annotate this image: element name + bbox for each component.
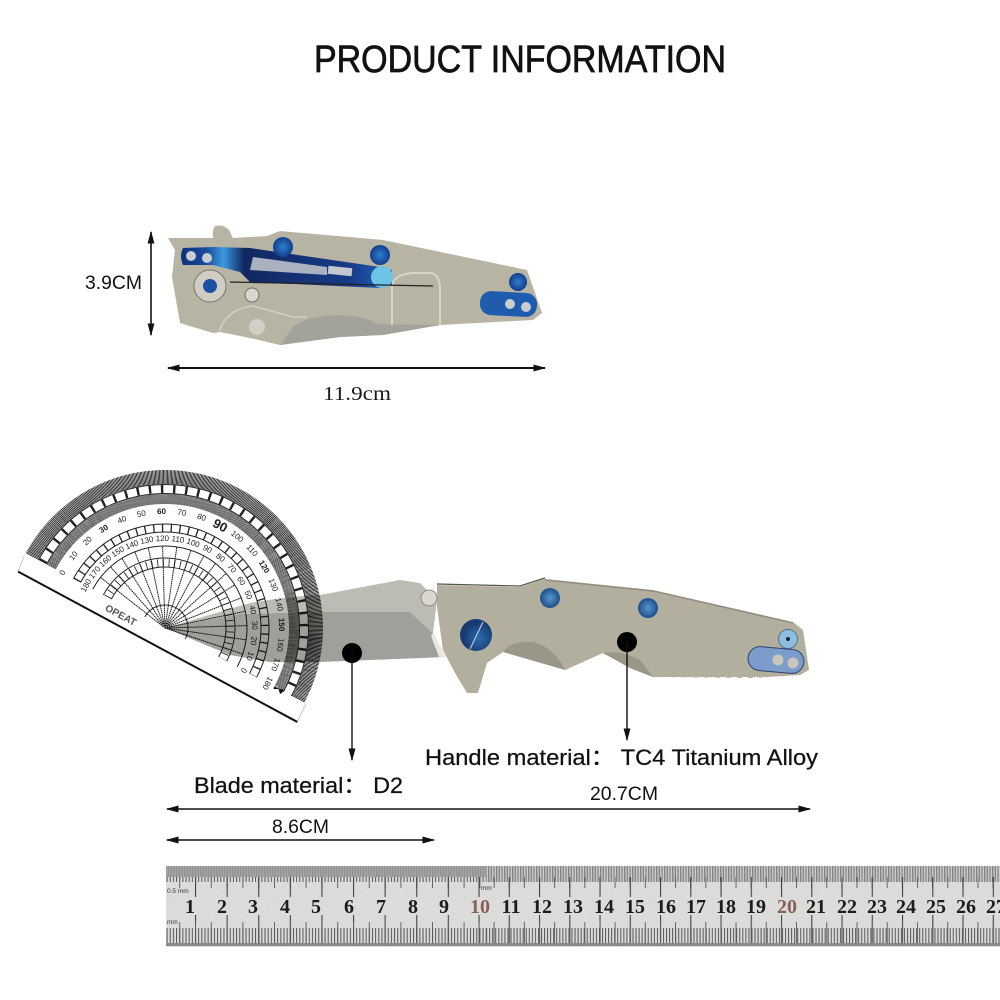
protractor inner scale: 140: [124, 538, 140, 551]
handle groove highlight: [219, 306, 307, 331]
height label: 3.9CM: [85, 273, 142, 294]
ruler numbers: 23: [867, 896, 887, 918]
ruler numbers: 17: [686, 896, 706, 918]
ruler numbers: 20: [777, 896, 797, 918]
protractor outer scale: 120: [257, 559, 272, 575]
total length label: 20.7CM: [590, 784, 658, 805]
ruler numbers: 24: [896, 896, 916, 918]
protractor outer scale: 80: [196, 512, 208, 523]
blade stop pin: [421, 590, 437, 606]
folded knife: [168, 226, 542, 345]
ruler numbers: 25: [926, 896, 946, 918]
protractor inner scale: 80: [214, 551, 227, 564]
protractor inner scale: 10: [244, 650, 256, 662]
blue screws: [273, 237, 527, 291]
pocket clip: [181, 247, 393, 288]
protractor inner scale: 180: [79, 577, 94, 594]
protractor outer scale: 100: [229, 529, 246, 545]
ruler numbers: 18: [716, 896, 736, 918]
protractor outer scale: 40: [116, 514, 128, 526]
lock line: [230, 282, 433, 286]
handle material label: Handle material： TC4 Titanium Alloy: [425, 745, 818, 770]
ruler numbers: 26: [956, 896, 976, 918]
protractor inner scale: 130: [139, 534, 155, 546]
ruler numbers: 14: [594, 896, 614, 918]
protractor outer scale: 60: [157, 507, 167, 516]
ruler numbers: 16: [656, 896, 676, 918]
ruler numbers: 2: [217, 896, 227, 918]
protractor inner scale: 170: [87, 564, 103, 581]
protractor outer scale: 0: [57, 568, 68, 577]
ruler numbers: 4: [280, 896, 290, 918]
handle top edge: [437, 578, 545, 586]
ruler numbers: 13: [563, 896, 583, 918]
protractor inner scale: 40: [247, 605, 258, 616]
ruler numbers: 6: [344, 896, 354, 918]
protractor inner scale: 150: [110, 544, 126, 559]
width dimension arrow: [168, 367, 545, 369]
blade callout: [342, 643, 362, 760]
protractor outer scale: 170: [269, 657, 282, 673]
ruler numbers: 21: [806, 896, 826, 918]
protractor outer scale: 110: [244, 543, 260, 559]
ruler numbers: 5: [311, 896, 321, 918]
ruler numbers: 12: [532, 896, 552, 918]
ruler unit labels: [167, 885, 492, 926]
protractor outer scale: 50: [136, 509, 147, 519]
folded knife body: [168, 226, 542, 345]
height dimension arrow: [150, 232, 152, 335]
folded blade edge: [280, 315, 440, 345]
ruler numbers: 15: [625, 896, 645, 918]
ruler numbers: [185, 896, 1000, 918]
ruler numbers: 9: [439, 896, 449, 918]
ruler unit labels: mm: [481, 885, 492, 892]
handle serrations: [665, 677, 800, 679]
protractor inner scale: 120: [156, 534, 170, 543]
protractor outer scale: 30: [98, 522, 110, 535]
protractor: [15, 411, 383, 722]
ruler numbers: 8: [408, 896, 418, 918]
protractor outer scale: 10: [67, 549, 80, 562]
ruler numbers: 10: [470, 896, 490, 918]
ruler numbers: 1: [185, 896, 195, 918]
protractor outer scale: [55, 461, 330, 692]
ruler numbers: 19: [746, 896, 766, 918]
handle: [437, 579, 809, 693]
handle top bevel: [545, 580, 793, 623]
ruler numbers: 3: [248, 896, 258, 918]
silver screws: [245, 288, 265, 335]
protractor inner scale: 90: [201, 543, 214, 556]
protractor outer scale: 140: [273, 597, 285, 612]
protractor outer scale: 130: [267, 577, 280, 593]
protractor outer scale: 160: [275, 638, 286, 653]
blade: [165, 580, 446, 662]
ruler unit labels: 0.5 mm: [167, 888, 189, 895]
protractor outer scale: 90: [210, 515, 230, 535]
pivot: [194, 270, 226, 302]
total length arrow: [167, 808, 810, 810]
steel ruler: [166, 866, 1000, 947]
protractor inner scale: 110: [171, 534, 185, 545]
pivot screw: [460, 619, 492, 651]
handle screws: [540, 588, 798, 648]
width label: 11.9cm: [323, 383, 392, 405]
protractor outer scale: 150: [277, 618, 286, 632]
title: PRODUCT INFORMATION: [314, 39, 726, 81]
ruler numbers: 22: [837, 896, 857, 918]
protractor inner scale: 50: [242, 589, 254, 601]
protractor inner scale: 100: [185, 537, 201, 550]
unfolded knife: [165, 578, 809, 693]
blade length arrow: [167, 839, 434, 841]
blade length label: 8.6CM: [272, 817, 329, 838]
protractor brand: OPEAT: [103, 603, 138, 629]
protractor outer scale: 20: [81, 534, 94, 547]
protractor outer scale: 70: [177, 508, 187, 518]
handle callout: [617, 632, 637, 740]
ruler numbers: 11: [502, 896, 520, 918]
rear plate: [747, 646, 805, 674]
protractor inner scale: 0: [239, 666, 249, 675]
finger groove shading: [503, 642, 653, 677]
protractor inner scale: 70: [226, 562, 239, 575]
protractor inner scale: 20: [248, 636, 259, 647]
protractor radial lines: [94, 517, 275, 666]
ruler unit labels: mm: [167, 919, 178, 926]
protractor inner scale: [79, 501, 292, 678]
ruler numbers: 7: [376, 896, 386, 918]
protractor inner scale: 60: [235, 575, 248, 588]
protractor outer scale: 180: [260, 675, 275, 692]
blade material label: Blade material： D2: [194, 773, 403, 798]
protractor inner scale: 160: [97, 553, 114, 569]
protractor inner scale: 30: [250, 621, 259, 630]
blade edge highlight: [431, 633, 446, 657]
rear plate: [479, 291, 538, 318]
frame lock cut: [392, 273, 440, 325]
